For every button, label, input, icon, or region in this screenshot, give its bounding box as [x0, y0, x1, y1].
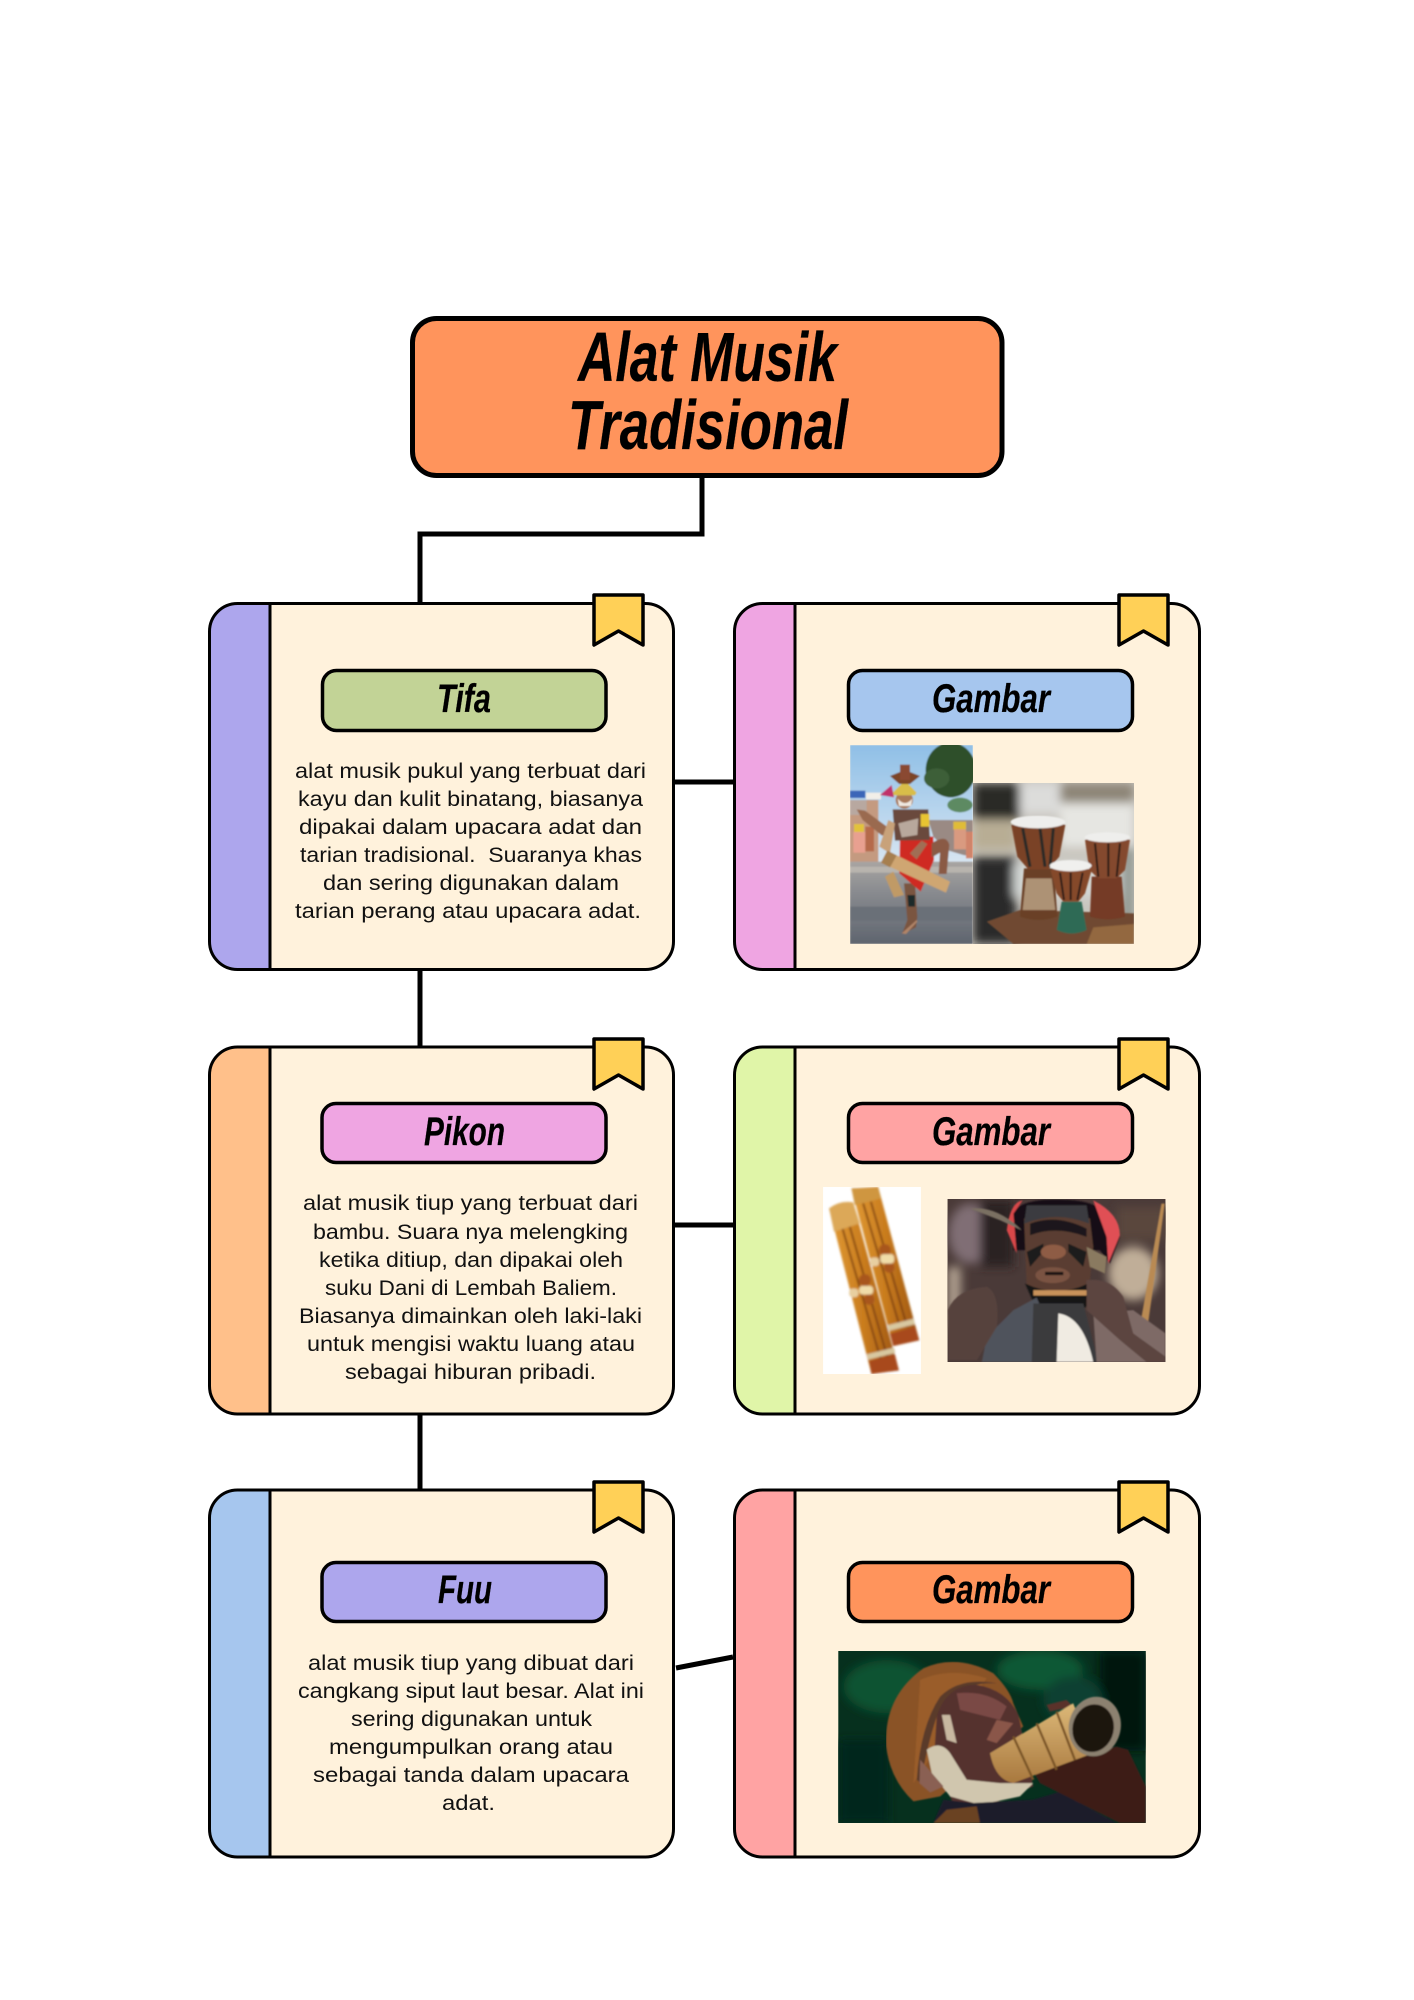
text: Fuu description: sering digunakan untuk: [351, 1707, 592, 1731]
heading pill: Tifa: Tifa: [437, 677, 491, 721]
title box: [412, 318, 1002, 476]
image: Tifa dancer: [850, 745, 973, 944]
text: Pikon description: Biasanya dimainkan oleh laki-laki: [299, 1304, 642, 1328]
panel: Fuu: [210, 1482, 674, 1857]
text: Pikon description: suku Dani di Lembah Baliem.: [325, 1276, 617, 1300]
connector: title to Tifa: [420, 478, 702, 604]
heading pill: Tifa: [322, 670, 606, 730]
panel: Gambar Tifa: [734, 595, 1200, 970]
connector: Tifa to image panel: [675, 780, 733, 784]
icon: bookmark: [1119, 1482, 1168, 1532]
heading pill: Gambar: Gambar: [932, 1110, 1052, 1154]
image: man playing pikon: [947, 1199, 1166, 1362]
image: man blowing fuu: [838, 1651, 1146, 1823]
connector: Fuu to image panel: [676, 1657, 733, 1668]
heading pill: Gambar: Gambar: [932, 677, 1052, 721]
title text: Tradisional: [568, 386, 849, 464]
text: Pikon description: bambu. Suara nya melengking: [313, 1220, 628, 1244]
panel: Tifa: [210, 595, 674, 970]
text: Tifa description: dipakai dalam upacara adat dan: [299, 815, 642, 839]
text: Pikon description: sebagai hiburan pribadi.: [345, 1360, 596, 1384]
text: Fuu description: mengumpulkan orang atau: [329, 1735, 613, 1759]
icon: bookmark: [1119, 1039, 1168, 1089]
heading pill: Gambar: [848, 670, 1132, 730]
heading pill: Gambar: [848, 1104, 1132, 1162]
heading pill: Gambar: [848, 1562, 1132, 1622]
heading pill: Pikon: [322, 1104, 606, 1162]
connector: Pikon to image panel: [675, 1222, 733, 1228]
icon: bookmark: [594, 595, 643, 645]
text: Tifa description: dan sering digunakan dalam: [323, 871, 619, 895]
text: Tifa description: tarian perang atau upacara adat.: [295, 899, 641, 923]
text: Fuu description: alat musik tiup yang dibuat dari: [308, 1651, 634, 1675]
image: bamboo pikon: [823, 1187, 921, 1374]
text: Tifa description: alat musik pukul yang terbuat dari: [295, 759, 646, 783]
heading pill: Fuu: [322, 1562, 606, 1622]
heading pill: Gambar: Gambar: [932, 1568, 1052, 1612]
text: Fuu description: sebagai tanda dalam upacara: [313, 1763, 629, 1787]
text: Tifa description: tarian tradisional. Suaranya khas: [300, 843, 642, 867]
panel: Gambar Pikon: [734, 1039, 1200, 1414]
text: Fuu description: adat.: [442, 1791, 495, 1815]
icon: bookmark: [594, 1482, 643, 1532]
title text: Alat Musik: [577, 318, 839, 396]
text: Pikon description: alat musik tiup yang terbuat dari: [303, 1191, 638, 1215]
text: Pikon description: ketika ditiup, dan dipakai oleh: [319, 1248, 623, 1272]
panel: Pikon: [210, 1039, 674, 1414]
icon: bookmark: [1119, 595, 1168, 645]
image: Tifa drums: [973, 783, 1134, 944]
text: Pikon description: untuk mengisi waktu luang atau: [307, 1332, 635, 1356]
text: Fuu description: cangkang siput laut besar. Alat ini: [298, 1679, 644, 1703]
text: Tifa description: kayu dan kulit binatang, biasanya: [298, 787, 643, 811]
panel: Gambar Fuu: [734, 1482, 1200, 1857]
connector: Pikon to Fuu: [418, 1414, 422, 1490]
heading pill: Pikon: Pikon: [424, 1110, 505, 1154]
heading pill: Fuu: Fuu: [438, 1568, 492, 1612]
connector: Tifa to Pikon: [418, 970, 422, 1047]
icon: bookmark: [594, 1039, 643, 1089]
